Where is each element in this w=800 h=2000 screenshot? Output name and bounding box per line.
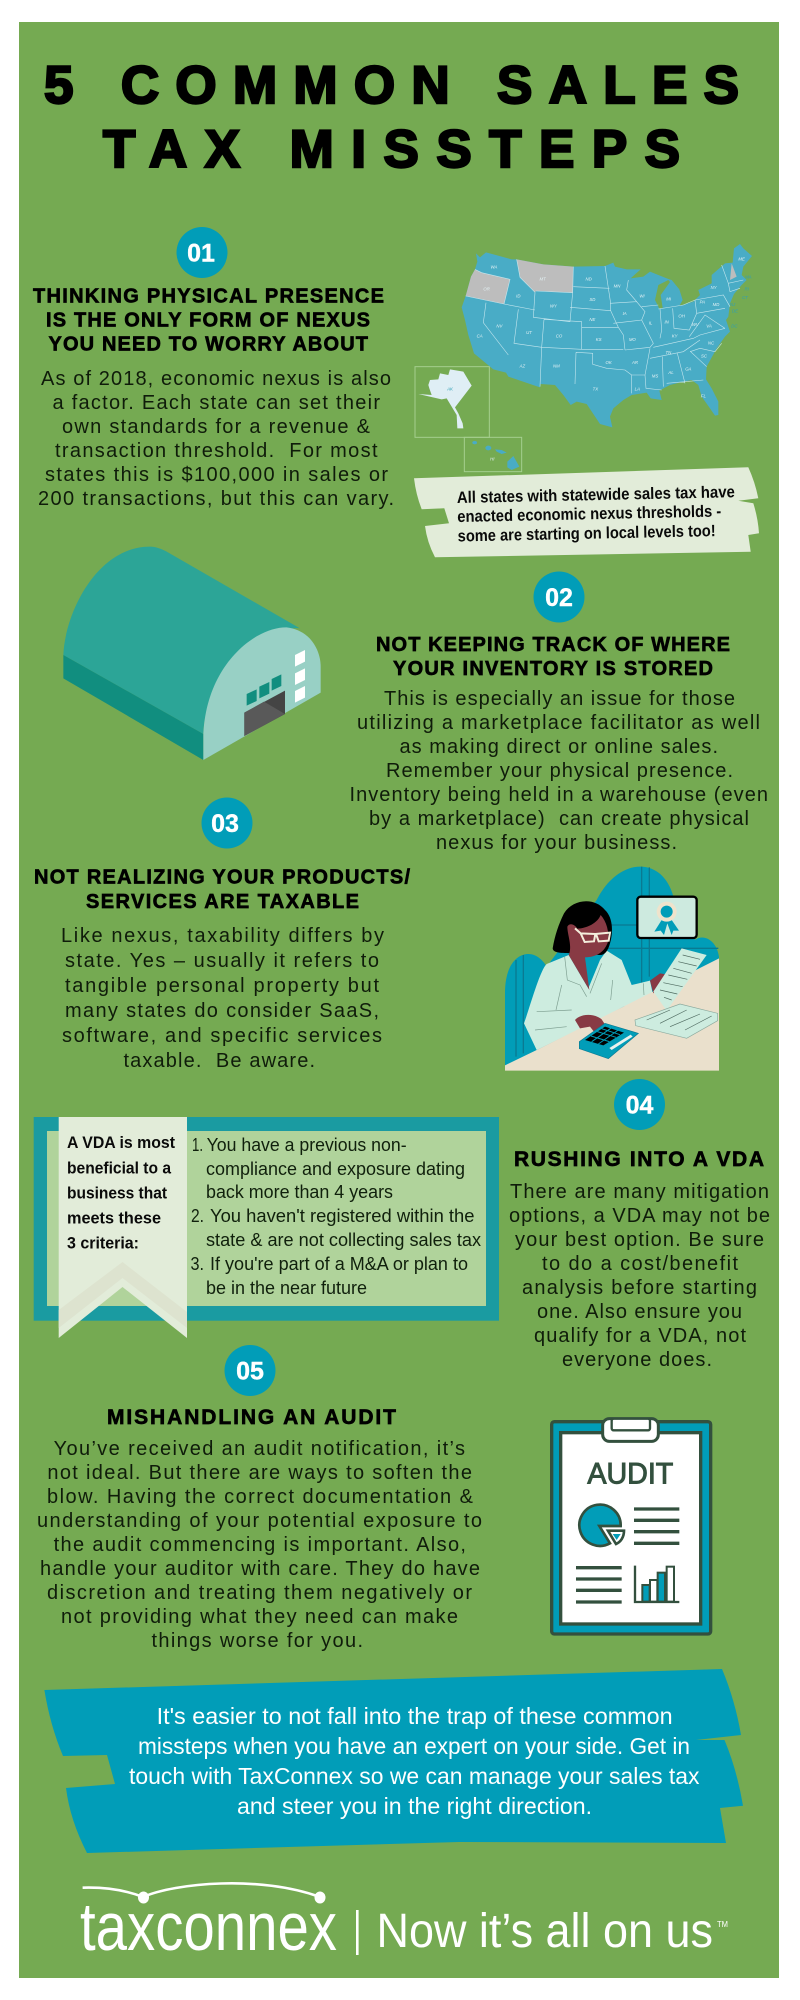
bar chart (635, 1566, 679, 1602)
state abbreviations: IL (649, 320, 653, 325)
body text 04: analysis before starting (522, 1277, 757, 1299)
heading 03: NOT REALIZING YOUR PRODUCTS/ (34, 866, 410, 888)
desk (505, 958, 719, 1071)
map of United States (415, 244, 752, 472)
state abbreviations: MS (652, 373, 658, 378)
state abbreviations: DC (731, 323, 738, 328)
state abbreviations: AL (667, 370, 674, 375)
state abbreviations: KY (672, 333, 679, 338)
illustration: woman with calculator (505, 867, 719, 1071)
paper stack (635, 1004, 718, 1038)
icon: audit clipboard: AUDIT (587, 1457, 673, 1490)
criteria list: 1. (192, 1134, 203, 1155)
badge 01: 01 (187, 240, 215, 268)
body text 05: understanding of your potential exposure to (37, 1510, 482, 1532)
state abbreviations: CA (477, 333, 483, 338)
body text 05: You’ve received an audit notification, it’s (54, 1438, 465, 1460)
callout: economic nexus note: some are starting on local levels too! (458, 522, 716, 545)
body text 03: state. Yes – usually it refers to (65, 950, 379, 972)
body text 01 (38, 368, 394, 510)
state abbreviations: TX (593, 387, 599, 392)
blue window backdrop (505, 867, 719, 1070)
ribbon text: meets these (67, 1208, 161, 1228)
section 04 (509, 1079, 770, 1371)
body text 04 (509, 1181, 770, 1371)
state abbreviations: PA (700, 299, 705, 304)
state abbreviations: GA (685, 367, 692, 372)
state abbreviations: MI (666, 296, 672, 301)
body text 04: one. Also ensure you (537, 1301, 742, 1323)
badge 03 (202, 798, 252, 848)
logo: taxconnex (80, 1883, 728, 1965)
body text 03 (61, 925, 384, 1072)
state abbreviations: IN (664, 319, 670, 324)
badge 04: 04 (626, 1092, 653, 1120)
body text 04: your best option. Be sure (515, 1229, 764, 1251)
body text 01: states this is $100,000 in sales or (45, 464, 388, 486)
pie chart (579, 1505, 624, 1546)
title: 5 COMMON SALES (44, 56, 739, 115)
body text 04: everyone does. (562, 1349, 712, 1371)
badge 02: 02 (545, 584, 573, 612)
no-threshold states in grey (466, 259, 737, 304)
hair (553, 901, 612, 955)
light green inner panel (47, 1131, 486, 1306)
state abbreviations: OK (606, 360, 613, 365)
badge 05 (224, 1345, 276, 1396)
badge 02 (534, 572, 584, 622)
body text 02: as making direct or online sales. (400, 736, 718, 758)
body text 01: own standards for a revenue & (62, 416, 371, 438)
criteria list: 2. (191, 1205, 204, 1226)
criteria list: You haven't registered within the (210, 1205, 474, 1226)
Alaska inset (415, 367, 489, 437)
criteria list: back more than 4 years (206, 1181, 393, 1202)
body text 02 (350, 688, 768, 854)
face and neck (567, 915, 608, 990)
section 05 (37, 1345, 482, 1652)
state abbreviations: NM (553, 363, 560, 368)
contiguous states (462, 244, 752, 427)
state abbreviations: SD (589, 297, 595, 302)
state abbreviations: MD (713, 302, 719, 307)
framed certificate (637, 897, 697, 938)
state abbreviations: WV (692, 322, 700, 327)
state abbreviations: DE (732, 309, 738, 314)
state abbreviations: ND (586, 277, 592, 282)
state abbreviations: VA (706, 324, 712, 329)
call to action banner: and steer you in the right direction. (237, 1793, 592, 1819)
body text 03: many states do consider SaaS, (65, 1000, 379, 1022)
Hawaii inset (464, 437, 522, 472)
body text 03: software, and specific services (62, 1025, 382, 1047)
body text 05: discretion and treating them negatively or (47, 1582, 472, 1604)
heading 01 (33, 286, 384, 356)
heading 01: IS THE ONLY FORM OF NEXUS (46, 310, 370, 332)
heading 02: NOT KEEPING TRACK OF WHERE (376, 634, 730, 656)
state abbreviations: UT (526, 330, 532, 335)
state abbreviations: MO (629, 337, 636, 342)
state abbreviations: IA (623, 311, 627, 316)
Lake Michigan (655, 280, 670, 309)
body text 01: a factor. Each state can set their (52, 392, 380, 414)
state borders (466, 259, 743, 393)
body text 01: 200 transactions, but this can vary. (38, 488, 394, 510)
teal frame (34, 1117, 499, 1321)
body text 04: options, a VDA may not be (509, 1205, 770, 1227)
call to action banner: It's easier to not fall into the trap of these common (157, 1703, 673, 1729)
state abbreviations: FL (701, 393, 706, 398)
logo: taxconnex: Now it’s all on us (376, 1905, 713, 1958)
heading 05: MISHANDLING AN AUDIT (107, 1406, 396, 1429)
body text 05: the audit commencing is important. Also, (54, 1534, 466, 1556)
body text 05: not ideal. But there are ways to soften the (47, 1462, 472, 1484)
state abbreviations: MN (614, 284, 621, 289)
body text 02: Remember your physical presence. (386, 760, 733, 782)
criteria list: state & are not collecting sales tax (206, 1229, 482, 1250)
calculator (579, 1023, 638, 1059)
criteria list: compliance and exposure dating (206, 1158, 465, 1179)
ribbon text: A VDA is most (67, 1133, 175, 1152)
callout: economic nexus note: enacted economic nexus thresholds - (457, 502, 721, 526)
call to action banner: missteps when you have an expert on your side. Get in (138, 1733, 690, 1759)
body text 05 (37, 1438, 482, 1652)
state abbreviations: AR (631, 360, 638, 365)
heading 04: RUSHING INTO A VDA (514, 1148, 764, 1171)
state abbreviations: RI (744, 287, 750, 292)
body text 05: things worse for you. (152, 1630, 363, 1652)
state abbreviations: LA (635, 387, 640, 392)
ribbon text: 3 criteria: (67, 1234, 139, 1252)
heading 02: YOUR INVENTORY IS STORED (393, 658, 713, 680)
criteria list: If you're part of a M&A or plan to (210, 1253, 468, 1274)
state abbreviations: KS (596, 337, 602, 342)
badge 01 (176, 227, 228, 278)
body text 05: not providing what they need can make (61, 1606, 458, 1628)
logo: taxconnex: TM (717, 1920, 728, 1929)
callout: economic nexus note (414, 467, 759, 557)
call to action banner: touch with TaxConnex so we can manage your sales tax (129, 1763, 700, 1789)
badge 04 (614, 1079, 665, 1130)
callout: economic nexus note: All states with statewide sales tax have (457, 483, 735, 507)
body text 02: Inventory being held in a warehouse (even (350, 784, 768, 806)
criteria list: 3. (190, 1253, 204, 1274)
state abbreviations: ID (516, 293, 521, 298)
hands (575, 973, 671, 1036)
body text 03: taxable. Be aware. (124, 1050, 315, 1072)
Hawaii inset: HI (490, 456, 495, 461)
panel: VDA criteria (34, 1117, 499, 1338)
glasses (575, 928, 610, 942)
body text 02: This is especially an issue for those (384, 688, 735, 710)
state abbreviations: NJ (730, 302, 736, 307)
Alaska inset: AK (446, 387, 454, 392)
call to action banner (44, 1669, 743, 1853)
ribbon text (67, 1133, 175, 1252)
body text 02: utilizing a marketplace facilitator as well (357, 712, 760, 734)
state abbreviations: NV (496, 324, 503, 329)
state abbreviations: TN (665, 350, 672, 355)
state abbreviations: NC (708, 340, 715, 345)
state abbreviations: NE (589, 317, 595, 322)
state abbreviations (477, 257, 752, 398)
badge 03: 03 (211, 810, 239, 838)
heading 03 (34, 866, 410, 913)
body text 05: blow. Having the correct documentation & (47, 1486, 474, 1508)
body text 02: by a marketplace) can create physical (369, 808, 749, 830)
criteria list: be in the near future (206, 1277, 367, 1298)
body text 01: transaction threshold. For most (55, 440, 378, 462)
state abbreviations: ME (738, 257, 745, 262)
state abbreviations: CT (742, 295, 748, 300)
icon: audit clipboard (552, 1419, 711, 1634)
body text 04: qualify for a VDA, not (534, 1325, 746, 1347)
title (44, 56, 739, 179)
state abbreviations: AZ (519, 363, 525, 368)
logo: taxconnex: taxconnex (80, 1889, 337, 1965)
heading 03: SERVICES ARE TAXABLE (86, 891, 359, 913)
ribbon text: business that (67, 1184, 167, 1202)
criteria list (190, 1134, 482, 1298)
state abbreviations: NY (711, 285, 718, 290)
state abbreviations: SC (701, 354, 708, 359)
shirt folds (535, 957, 644, 1030)
badge 05: 05 (236, 1358, 264, 1386)
state abbreviations: MA (745, 274, 752, 279)
criteria list: You have a previous non- (207, 1134, 407, 1155)
heading 02 (376, 634, 730, 680)
section 03 (34, 798, 410, 1072)
section 01 (33, 227, 394, 510)
icon: warehouse (63, 547, 321, 760)
body text 03: Like nexus, taxability differs by (61, 925, 384, 947)
body text 01: As of 2018, economic nexus is also (41, 368, 391, 390)
body text 02: nexus for your business. (436, 832, 677, 854)
ribbon (59, 1117, 187, 1338)
state abbreviations: OR (483, 287, 490, 292)
paper held up (653, 948, 707, 1011)
shirt (524, 951, 653, 1050)
body text 05: handle your auditor with care. They do have (40, 1558, 480, 1580)
state abbreviations: MT (540, 277, 546, 282)
body text 04: to do a cost/benefit (542, 1253, 738, 1275)
state abbreviations: WA (491, 264, 498, 269)
heading 01: THINKING PHYSICAL PRESENCE (33, 286, 384, 308)
body text 04: There are many mitigation (510, 1181, 769, 1203)
state abbreviations: WI (639, 294, 645, 299)
section 02 (350, 572, 768, 854)
heading 01: YOU NEED TO WORRY ABOUT (48, 334, 368, 356)
state abbreviations: CO (556, 334, 563, 339)
ribbon text: beneficial to a (67, 1158, 171, 1178)
body text 03: tangible personal property but (65, 975, 379, 997)
title: TAX MISSTEPS (103, 120, 680, 179)
state abbreviations: WY (550, 304, 558, 309)
state abbreviations: OH (678, 313, 686, 318)
